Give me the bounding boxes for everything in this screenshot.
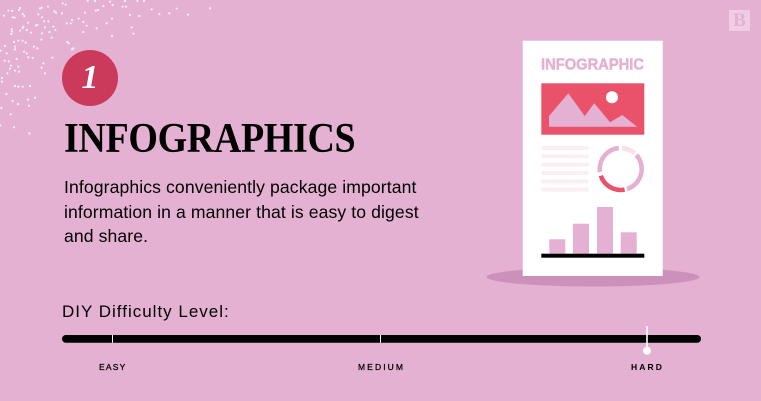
label: easy: EASY [99,362,126,372]
brand logo: B [733,10,746,31]
document heading: INFOGRAPHIC [541,57,644,74]
label: medium: MEDIUM [358,362,405,372]
description text [64,177,419,246]
bar chart [541,207,644,258]
title: INFOGRAPHICS [64,116,355,162]
document shadow [486,268,700,286]
text lines [541,146,589,192]
label: hard: HARD [631,362,664,372]
description text: and share. [64,226,148,246]
donut chart [600,148,642,190]
number badge: 1 [82,59,98,96]
description text: Infographics conveniently package important [64,177,416,197]
scale bar [62,335,701,343]
document page [523,41,663,276]
number badge [62,50,118,106]
medium tick [380,335,381,343]
easy tick [112,335,113,343]
image placeholder [541,83,644,135]
hard marker [643,326,651,355]
brand logo [729,10,750,31]
difficulty heading: DIY Difficulty Level: [62,302,230,320]
description text: information in a manner that is easy to digest [64,202,419,222]
